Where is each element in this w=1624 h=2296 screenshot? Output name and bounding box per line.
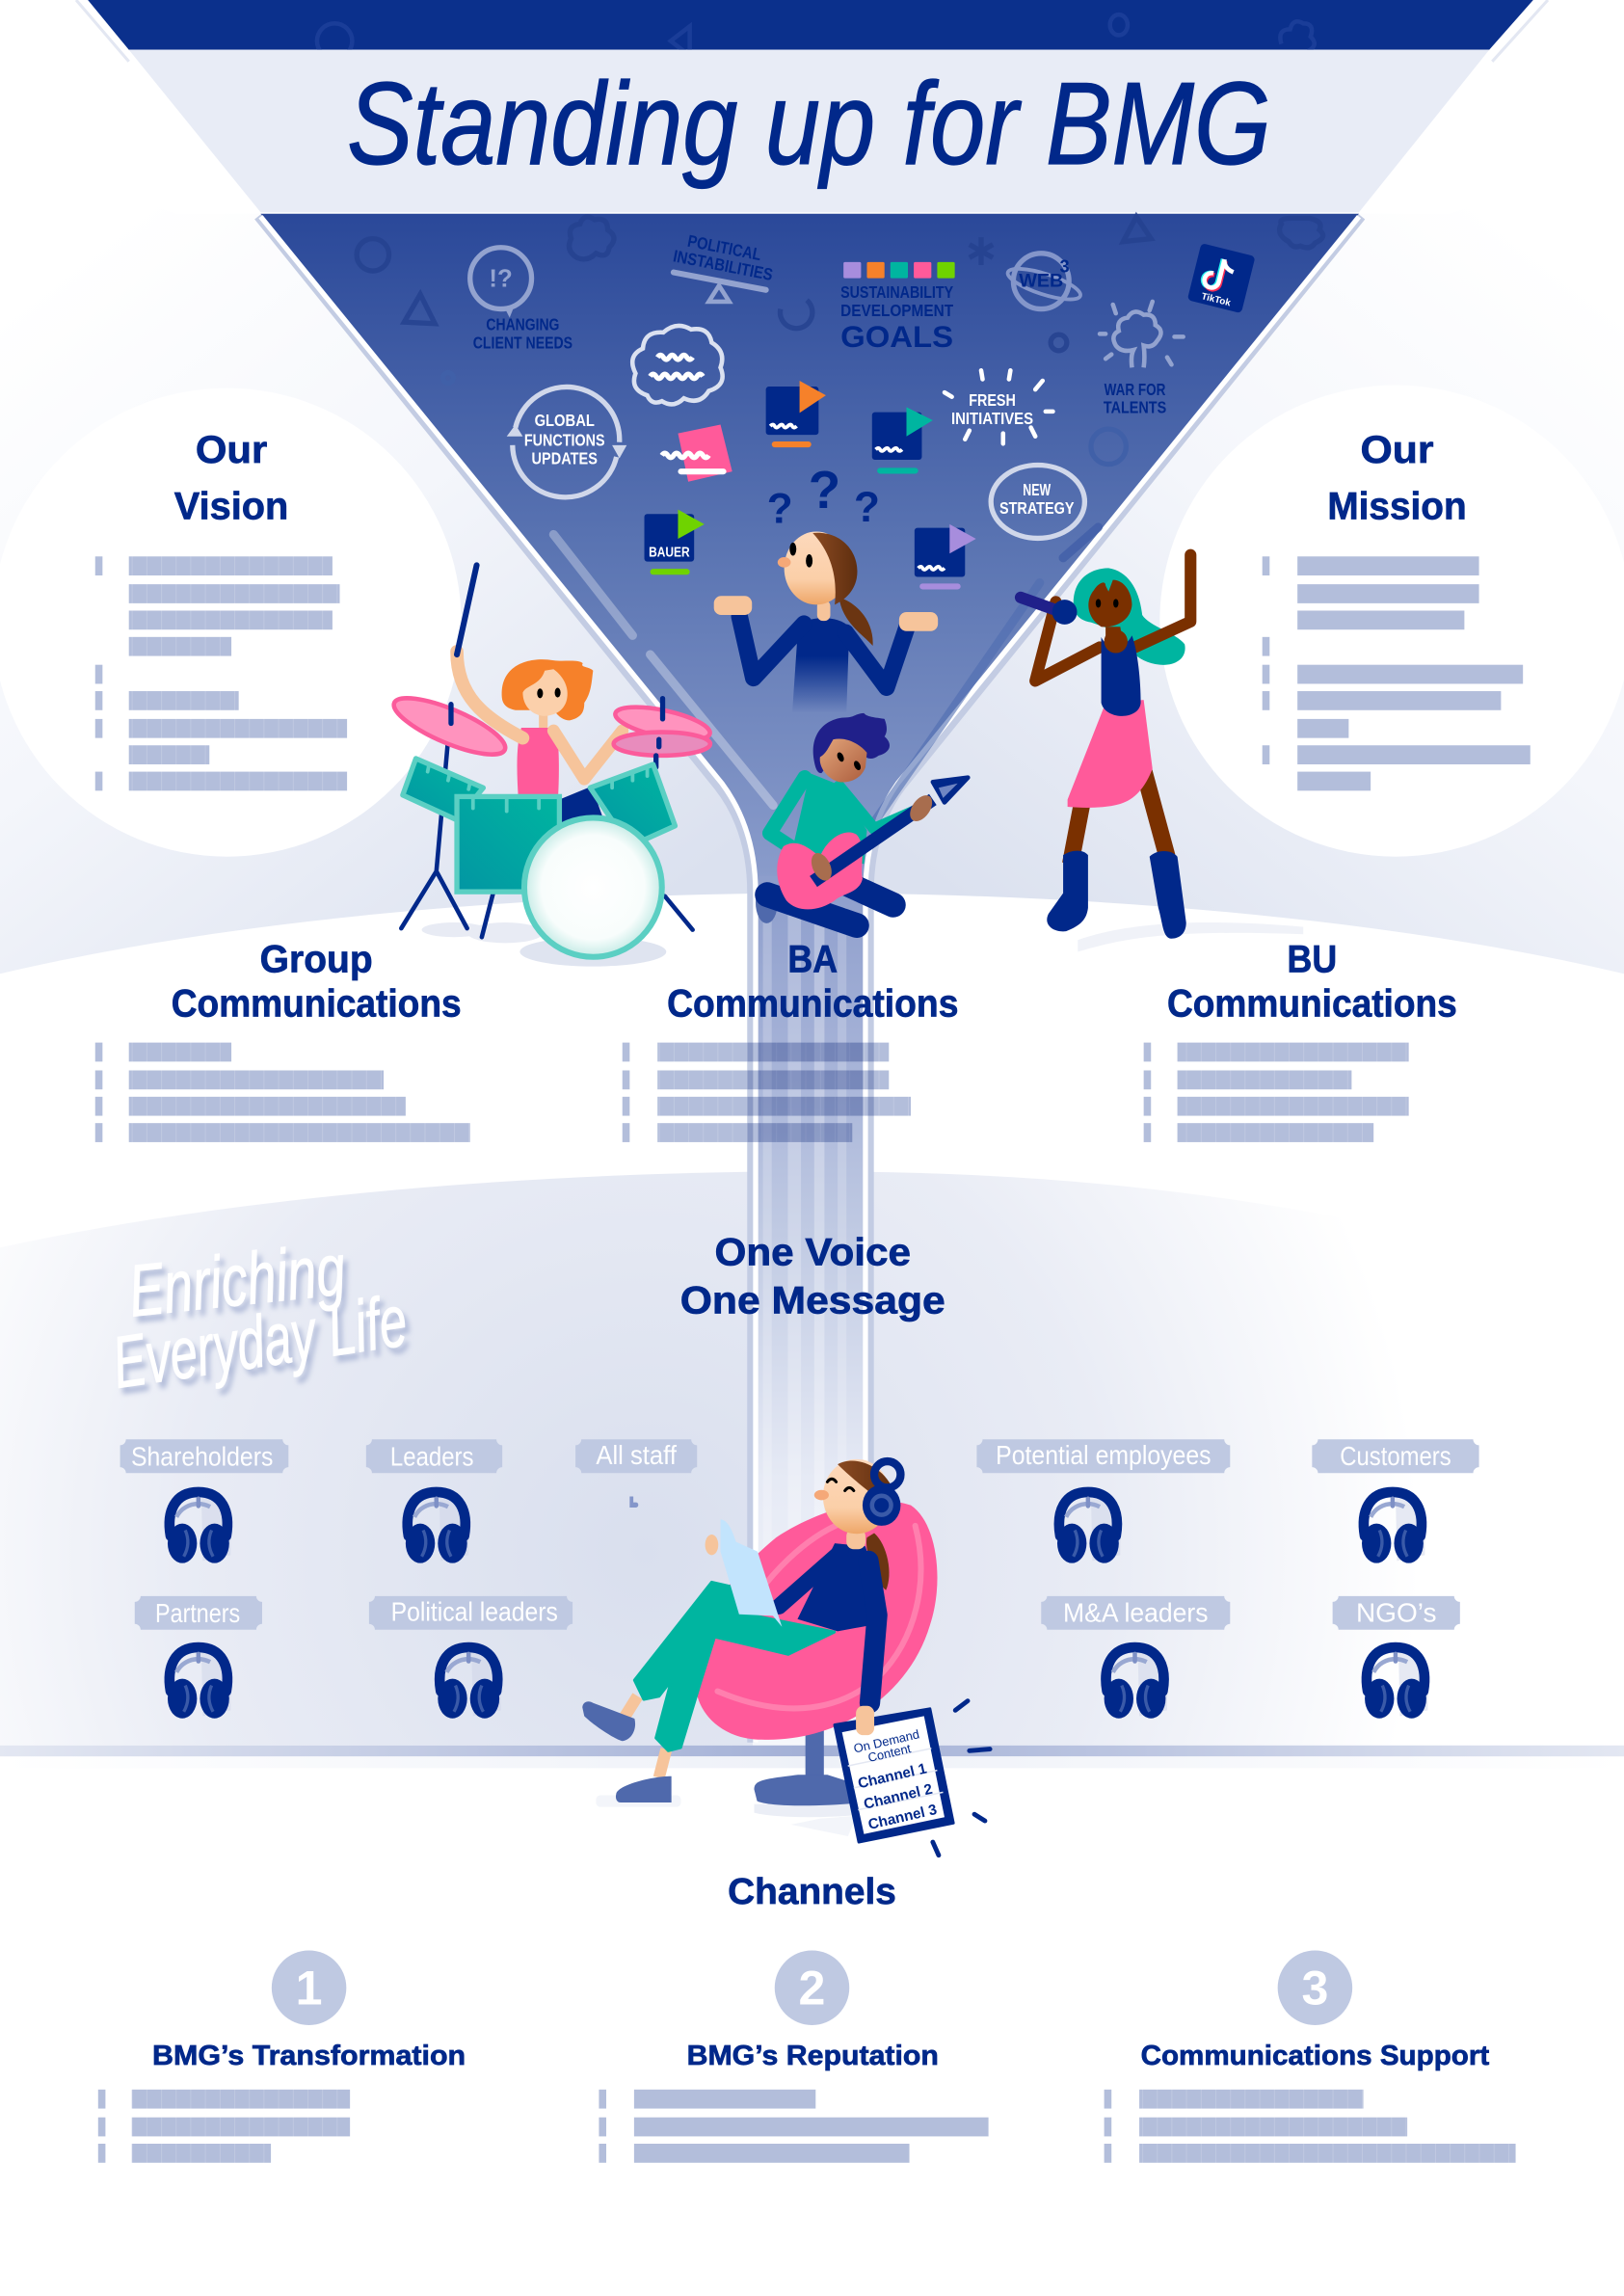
title: Standing up for BMG (347, 58, 1271, 189)
icon: tiktok: TikTok (1200, 291, 1232, 308)
mission text block (1263, 556, 1531, 790)
floor soft fade (0, 1756, 1624, 1768)
funnel (260, 214, 1359, 878)
icon: fresh initiatives: FRESH (969, 390, 1016, 410)
icon: bauer book (645, 510, 705, 574)
character: drummer (387, 565, 712, 967)
audience label: shareholders: Shareholders (131, 1442, 273, 1472)
character: thinking person (714, 531, 938, 713)
channel 3 (1105, 1950, 1516, 2163)
icon: thought cloud (632, 326, 723, 404)
icon: orange book (766, 381, 826, 447)
icon: headphones partners (168, 1647, 231, 1719)
background: right spotlight side (870, 0, 1624, 974)
icon: new strategy (991, 465, 1084, 538)
icon: changing client needs: CLIENT NEEDS (473, 334, 572, 353)
audience label: ngos (1333, 1596, 1460, 1630)
audience label: all staff (575, 1439, 697, 1473)
icon: question marks (767, 460, 880, 532)
audience label: customers: Customers (1340, 1441, 1451, 1471)
icon: web 3 (1004, 254, 1083, 309)
icon: changing client needs: CHANGING (486, 315, 559, 334)
icon: global functions updates: GLOBAL (535, 411, 595, 430)
icon: political instabilities: INSTABILITIES (672, 246, 775, 284)
vision text block (95, 556, 347, 790)
icon: global functions updates: UPDATES (532, 449, 598, 468)
icon: question marks: ? (809, 460, 840, 520)
audience label: political leaders: Political leaders (391, 1597, 558, 1627)
vision heading: Vision (174, 486, 288, 528)
channel 1: 1 (296, 1962, 323, 2016)
heading: one voice one message (680, 1232, 945, 1322)
audience label: m&a leaders: M&A leaders (1063, 1597, 1208, 1627)
heading: group communications: Communications (172, 982, 462, 1025)
icon: global functions updates (507, 387, 626, 497)
panel: audience backdrop (0, 1171, 1624, 1746)
channel 2 (599, 1950, 989, 2163)
icon: political instabilities (672, 231, 775, 302)
icon: new strategy: NEW (1023, 480, 1052, 499)
audience label: customers (1312, 1439, 1479, 1473)
heading: bu communications (1167, 939, 1457, 1025)
funnel faint lower shapes (443, 373, 1126, 465)
icon: headphones m&a leaders (1105, 1647, 1168, 1719)
vision heading: Our (196, 429, 267, 471)
channel 3: 3 (1301, 1962, 1328, 2016)
icon: tiktok (1187, 243, 1256, 313)
audience label: all staff: All staff (596, 1440, 677, 1470)
icon: sustainability development goals (840, 262, 955, 354)
icon: on demand content tablet: Channel 2 (863, 1781, 934, 1813)
icon: on demand content tablet: Channel 1 (857, 1760, 929, 1792)
icon: small mark under all staff (629, 1497, 638, 1508)
heading: one voice one message: One Voice (714, 1232, 911, 1274)
slogan: enriching everyday life: Enriching (125, 1229, 349, 1333)
icon: changing client needs (470, 248, 572, 353)
icon: pink book (662, 425, 732, 482)
icon: new strategy: STRATEGY (999, 498, 1075, 518)
icon: headphones political leaders (438, 1647, 501, 1719)
icon: fresh initiatives (945, 370, 1052, 443)
channel 3: Communications Support (1141, 2041, 1490, 2071)
panel: stage white floor (0, 894, 1624, 1171)
channel 1: BMG’s Transformation (152, 2041, 466, 2071)
heading: ba communications: Communications (667, 982, 958, 1025)
icon: question marks: ? (767, 485, 793, 532)
icon: teal book (872, 407, 933, 473)
icon: on demand content tablet: On Demand (852, 1726, 920, 1756)
background: top corners (0, 0, 1624, 214)
icon: question marks: ? (854, 484, 880, 531)
icon: fresh initiatives: INITIATIVES (951, 409, 1033, 428)
icon: on demand content tablet: Channel 3 (866, 1802, 939, 1833)
funnel stem (753, 875, 870, 1746)
heading: ba communications: BA (787, 939, 838, 981)
icon: sustainability development goals: SUSTAINABILITY (840, 282, 953, 302)
audience label: ngos: NGO’s (1356, 1597, 1437, 1627)
ba communications text block (623, 1043, 911, 1142)
audience label: partners: Partners (155, 1598, 240, 1628)
vision heading (174, 429, 288, 528)
mission heading: Mission (1327, 486, 1467, 528)
channel 2: 2 (799, 1962, 825, 2016)
mission heading (1327, 429, 1467, 528)
funnel inner white line: right (865, 217, 1359, 1743)
slogan: enriching everyday life (107, 1229, 413, 1404)
icon: sustainability development goals: GOALS (840, 319, 953, 354)
character: guitarist (756, 713, 968, 925)
icon: on demand content tablet (835, 1706, 953, 1842)
icon: web 3: WEB (1019, 271, 1063, 292)
heading: group communications: Group (260, 939, 373, 981)
icon: sustainability development goals: DEVELOPMENT (840, 301, 953, 320)
channel 1 (98, 1950, 466, 2163)
icon: headphones leaders (406, 1492, 469, 1563)
title band: pale trapezoid (129, 50, 1489, 212)
icon: war for talents: WAR FOR (1105, 380, 1166, 399)
character: woman in chair (582, 1459, 938, 1836)
icon: global functions updates: FUNCTIONS (524, 431, 605, 450)
icon: purple book (915, 524, 976, 589)
icon: headphones shareholders (168, 1492, 231, 1563)
heading: group communications (172, 939, 462, 1025)
icon: headphones potential employees (1057, 1492, 1121, 1563)
group communications text block (95, 1043, 470, 1142)
bu communications text block (1144, 1043, 1409, 1142)
icon: tablet spark ticks (933, 1701, 990, 1855)
background: left spotlight side (0, 0, 753, 974)
top band outer pale lines (76, 0, 1548, 62)
channel 2: BMG’s Reputation (687, 2041, 939, 2071)
heading: bu communications: Communications (1167, 982, 1457, 1025)
heading: bu communications: BU (1288, 939, 1337, 981)
audience label: leaders (366, 1439, 502, 1473)
panel: mission circle (1159, 386, 1624, 857)
panel: vision circle (0, 388, 462, 857)
funnel light streaks (553, 527, 1099, 820)
icon: headphones ngos (1365, 1647, 1428, 1719)
horizontal floor band (0, 1746, 1624, 1756)
audience label: partners (135, 1596, 262, 1630)
slogan: enriching everyday life: Everyday Life (107, 1280, 413, 1404)
funnel inner white line: left (260, 217, 756, 1743)
audience label: leaders: Leaders (390, 1442, 474, 1472)
icon: political instabilities: POLITICAL (686, 231, 763, 264)
icon: bauer book: BAUER (649, 544, 690, 560)
icon: changing client needs: !? (489, 266, 513, 293)
mission heading: Our (1361, 429, 1433, 471)
audience label: potential employees: Potential employees (996, 1440, 1211, 1470)
icon: war for talents (1100, 302, 1184, 416)
funnel outline: left (257, 217, 751, 1743)
title band: navy top (88, 0, 1533, 59)
heading: ba communications (667, 939, 958, 1025)
funnel decorative shapes (357, 217, 1323, 351)
character: singer (1021, 555, 1303, 951)
heading: channels: Channels (728, 1872, 896, 1912)
icon: headphones customers (1362, 1492, 1425, 1563)
heading: one voice one message: One Message (680, 1280, 945, 1322)
funnel outline: right (870, 217, 1362, 1743)
icon: web 3: 3 (1060, 256, 1070, 277)
icon: on demand content tablet: Content (866, 1741, 913, 1765)
icon: war for talents: TALENTS (1104, 397, 1166, 416)
